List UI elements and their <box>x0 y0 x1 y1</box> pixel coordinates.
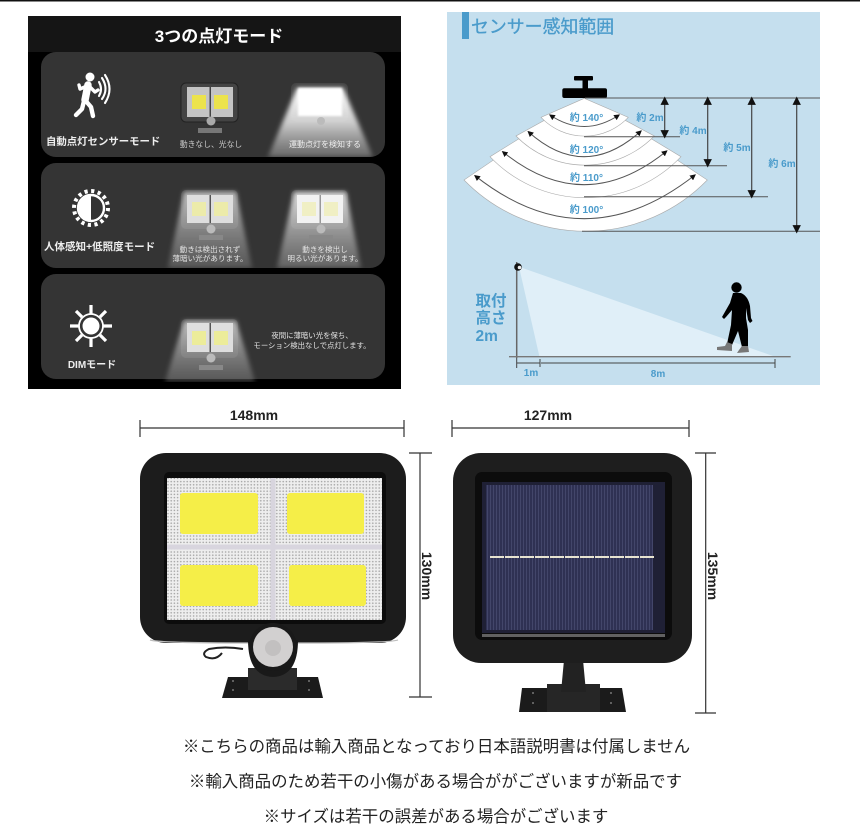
dimension: front height: 130mm <box>419 552 435 600</box>
light cone <box>519 267 773 356</box>
icon: walking person with sensor waves <box>76 72 110 116</box>
busbar <box>490 556 655 558</box>
lamp: bright state <box>277 190 361 268</box>
lamp: unlit state <box>181 83 238 133</box>
label: auto sensor mode: 自動点灯センサーモード <box>46 135 160 148</box>
distance guide lines <box>582 98 820 231</box>
LED panels <box>180 493 366 606</box>
heading: センサー感知範囲 <box>471 17 614 37</box>
title band <box>28 16 401 52</box>
floor dimension labels: 8m <box>651 369 665 380</box>
title: 3つの点灯モード <box>155 27 283 46</box>
top edge rule <box>0 0 860 2</box>
label: mounting height: 2m <box>476 328 498 345</box>
mounting bracket <box>222 668 323 698</box>
motion sensor <box>248 623 298 677</box>
floor dimension arrows <box>517 358 775 368</box>
cable <box>204 648 243 658</box>
card: DIM mode <box>41 274 385 382</box>
notes <box>183 738 690 826</box>
card: auto sensor mode <box>41 52 385 157</box>
dimension: front width <box>140 407 404 437</box>
floor dimension labels: 1m <box>524 368 538 379</box>
caption: motion detected: 運動点灯を検知する <box>289 139 361 149</box>
notes: ※サイズは若干の誤差がある場合がございます <box>264 807 608 826</box>
angle labels: 約 140° <box>570 111 603 124</box>
label: human sensing and low light: 人体感知+低照度モード <box>44 240 155 253</box>
dimension: back width <box>452 407 689 437</box>
solar cell <box>482 482 665 633</box>
panel: sensor detection range <box>447 12 820 385</box>
panel: lighting modes <box>28 16 401 389</box>
label: DIM mode: DIMモード <box>68 359 116 371</box>
caption: dim light without motion <box>172 244 248 263</box>
angle labels: 約 110° <box>570 171 603 184</box>
caption: bright light with motion <box>287 244 363 263</box>
label: mounting height <box>476 292 507 345</box>
heading accent bar <box>462 12 469 39</box>
product: solar panel back view <box>453 453 692 712</box>
dimension: front width: 148mm <box>230 407 278 423</box>
caption: dim light without motion: 動きは検出されず <box>180 244 241 254</box>
distance labels: 約 6m <box>768 157 796 170</box>
chart: detection fans <box>464 98 707 231</box>
caption: DIM description: モーション検出なしで点灯します。 <box>253 341 371 350</box>
distance labels: 約 2m <box>636 111 664 124</box>
reflector divider <box>167 478 382 620</box>
notes: ※輸入商品のため若干の小傷がある場合ががございますが新品です <box>189 772 682 791</box>
distance labels: 約 4m <box>679 124 707 137</box>
distance labels <box>636 111 796 170</box>
floor dimension labels <box>524 368 665 380</box>
dimension: back width: 127mm <box>524 407 572 423</box>
distance arrows <box>665 99 797 231</box>
lamp: bright when motion detected <box>268 83 373 157</box>
lamp: dim state <box>168 190 252 268</box>
housing <box>140 453 406 643</box>
dimension: back height <box>695 453 721 713</box>
ground line <box>509 356 791 358</box>
caption: DIM description: 夜間に薄暗い光を保ち、 <box>271 331 353 340</box>
product: lamp front view <box>140 453 406 698</box>
icon: sun <box>70 305 112 347</box>
dimension: front height <box>409 453 435 697</box>
reflector <box>167 478 382 620</box>
caption: bright light with motion: 動きを検出し <box>302 244 348 254</box>
notes: ※こちらの商品は輸入商品となっており日本語説明書は付属しません <box>183 738 690 756</box>
distance labels: 約 5m <box>723 141 751 154</box>
caption: no motion no light: 動きなし、光なし <box>180 139 242 149</box>
label: mounting height: 高さ <box>476 309 507 327</box>
angle labels: 約 100° <box>570 203 603 216</box>
bracket <box>519 660 626 712</box>
caption: bright light with motion: 明るい光があります。 <box>287 253 363 263</box>
icon: ceiling-mounted sensor <box>562 76 607 98</box>
label: mounting height: 取付 <box>476 292 507 310</box>
card: human sensing and low light mode <box>41 163 385 268</box>
icon: walking person <box>717 282 752 353</box>
angle labels <box>570 111 603 216</box>
angle labels: 約 120° <box>570 143 603 156</box>
caption: dim light without motion: 薄暗い光があります。 <box>172 253 248 263</box>
housing <box>453 453 692 663</box>
glass edge highlight <box>482 634 665 637</box>
lamp: dim mode <box>165 319 255 382</box>
icon: half-filled sun <box>74 191 108 225</box>
dimension: back height: 135mm <box>705 552 721 600</box>
icon: pole-mounted lamp <box>514 262 522 358</box>
caption: DIM description <box>253 331 371 350</box>
